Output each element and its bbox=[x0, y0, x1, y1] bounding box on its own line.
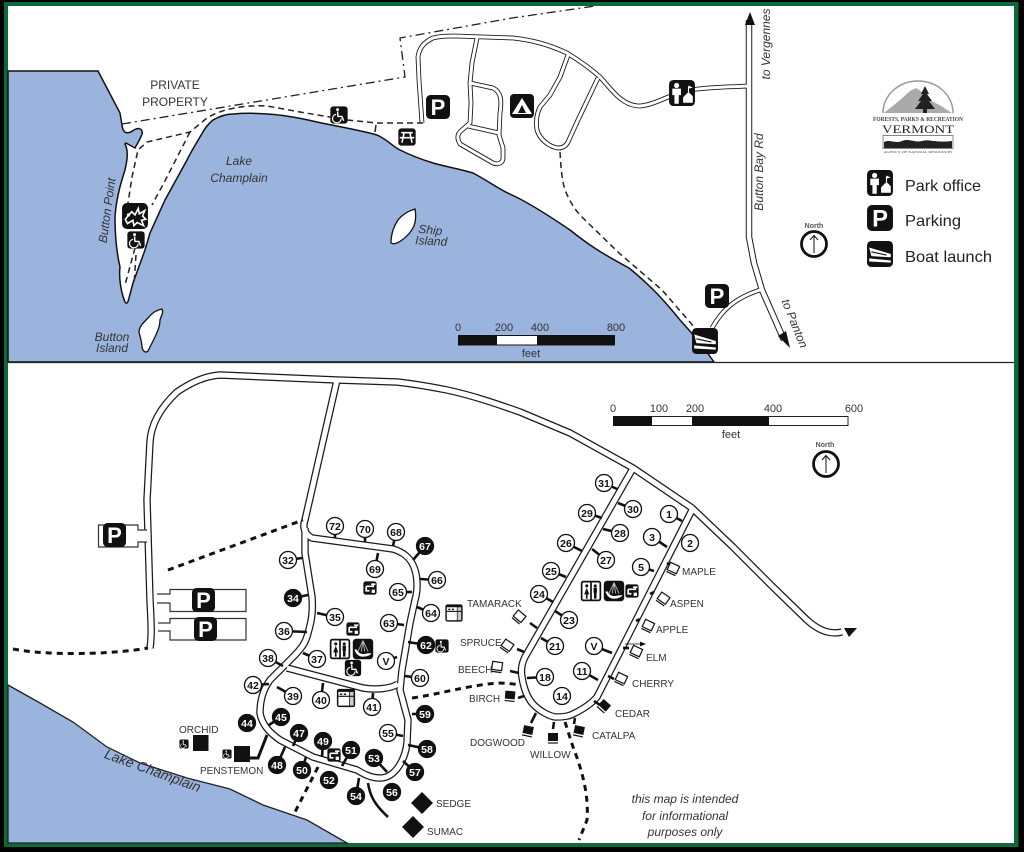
cherry: CHERRY bbox=[632, 679, 674, 690]
site 59: 59 bbox=[419, 709, 431, 721]
parking pad north bbox=[157, 588, 246, 613]
site 26: 26 bbox=[560, 538, 572, 550]
elm bbox=[623, 642, 667, 664]
site 29 bbox=[578, 504, 602, 522]
lake champlain label bbox=[210, 154, 268, 185]
logo: AGENCY OF NATURAL RESOURCES bbox=[884, 150, 953, 154]
site 14: 14 bbox=[556, 691, 568, 703]
site 36: 36 bbox=[278, 626, 290, 638]
site 50: 50 bbox=[296, 765, 308, 777]
site 25: 25 bbox=[545, 566, 557, 578]
cedar bbox=[594, 699, 650, 720]
aspen: ASPEN bbox=[670, 599, 704, 610]
site 54: 54 bbox=[350, 791, 362, 803]
icon: accessible west bbox=[345, 660, 361, 676]
catalpa bbox=[573, 718, 636, 742]
site 68: 68 bbox=[390, 527, 402, 539]
disclaimer: purposes only bbox=[647, 825, 723, 839]
north arrow overview bbox=[802, 223, 826, 256]
site 63: 63 bbox=[383, 618, 395, 630]
site 37 bbox=[303, 650, 326, 668]
site 38 bbox=[260, 650, 283, 666]
scale bar detail: 600 bbox=[845, 403, 863, 415]
scale bar detail: feet bbox=[722, 429, 740, 441]
site 56: 56 bbox=[386, 787, 398, 799]
site 42 bbox=[244, 676, 269, 694]
site 30 bbox=[618, 500, 642, 518]
sumac cabin bbox=[402, 816, 463, 838]
site 36 bbox=[276, 622, 307, 640]
site 29: 29 bbox=[581, 508, 593, 520]
lake champlain label: Lake bbox=[226, 154, 252, 168]
site 34: 34 bbox=[287, 593, 299, 605]
ship island label: Island bbox=[415, 233, 448, 249]
site 23: 23 bbox=[563, 615, 575, 627]
icon: park office bbox=[669, 80, 695, 106]
scale bar overview: 800 bbox=[607, 322, 625, 334]
site 27: 27 bbox=[600, 555, 612, 567]
site 23 bbox=[555, 611, 578, 628]
site 52 bbox=[320, 772, 338, 788]
icon: water spigot east bbox=[625, 584, 639, 598]
site 69: 69 bbox=[369, 564, 381, 576]
site 1: 1 bbox=[666, 509, 672, 521]
logo: VERMONT bbox=[882, 122, 955, 136]
site 30: 30 bbox=[627, 504, 639, 516]
maple: MAPLE bbox=[682, 567, 716, 578]
site 32 bbox=[280, 552, 302, 568]
site 39: 39 bbox=[287, 691, 299, 703]
apple: APPLE bbox=[656, 625, 689, 636]
scale bar detail: 100 bbox=[650, 403, 668, 415]
site 35 bbox=[317, 608, 344, 626]
button point label: Button Point bbox=[96, 176, 119, 244]
site 57: 57 bbox=[409, 767, 421, 779]
site 47: 47 bbox=[293, 728, 305, 740]
scale bar overview: 200 bbox=[495, 322, 513, 334]
campground roads bbox=[147, 375, 842, 778]
lake champlain water detail bbox=[8, 685, 347, 843]
button island label: Island bbox=[96, 341, 128, 355]
site 53 bbox=[366, 750, 387, 772]
site 38: 38 bbox=[262, 653, 274, 665]
disclaimer: for informational bbox=[642, 809, 728, 823]
scale bar detail bbox=[610, 403, 863, 441]
icon: restroom west bbox=[330, 639, 350, 659]
site 44: 44 bbox=[241, 718, 253, 730]
vault V east bbox=[586, 638, 612, 654]
site 2: 2 bbox=[687, 538, 693, 550]
campsites east loop bbox=[527, 474, 698, 704]
north arrow detail bbox=[814, 442, 838, 476]
icon: beach area bbox=[122, 203, 148, 229]
property boundary bbox=[122, 6, 595, 124]
site 31 bbox=[596, 474, 617, 492]
elm: ELM bbox=[646, 653, 667, 664]
site 50 bbox=[294, 757, 310, 778]
parking pad west: P bbox=[107, 523, 122, 548]
site 45 bbox=[269, 708, 290, 726]
site 48 bbox=[268, 747, 286, 774]
site 54 bbox=[348, 778, 364, 804]
icon: tent bbox=[510, 94, 534, 118]
penstemon cabin bbox=[200, 735, 267, 777]
site 49 bbox=[314, 732, 332, 757]
icon: shower east bbox=[604, 581, 624, 601]
north arrow overview: North bbox=[805, 223, 823, 230]
legend bbox=[867, 170, 992, 267]
site 53: 53 bbox=[368, 753, 380, 765]
legend: parking: P bbox=[872, 206, 888, 233]
site 48: 48 bbox=[271, 760, 283, 772]
site 31: 31 bbox=[598, 478, 610, 490]
legend: park office: Park office bbox=[905, 178, 981, 195]
logo bbox=[873, 81, 963, 154]
icon: boat launch bbox=[692, 328, 718, 354]
orchid cabin bbox=[179, 725, 218, 751]
icon: parking launch bbox=[705, 284, 729, 309]
site 58: 58 bbox=[421, 744, 433, 756]
panel: park overview map bbox=[8, 6, 1014, 362]
site 11: 11 bbox=[576, 666, 588, 678]
site 42: 42 bbox=[247, 680, 259, 692]
site 72 bbox=[326, 518, 344, 538]
private property label: PRIVATE bbox=[150, 78, 200, 92]
icon: water spigot central bbox=[346, 622, 360, 636]
ship island bbox=[391, 209, 416, 244]
site 49: 49 bbox=[317, 736, 329, 748]
site 25 bbox=[542, 562, 566, 580]
site 67: 67 bbox=[419, 541, 431, 553]
spruce bbox=[460, 638, 524, 653]
spruce: SPRUCE bbox=[460, 638, 502, 649]
sumac cabin: SUMAC bbox=[427, 827, 463, 838]
campsites west loop bbox=[238, 518, 446, 804]
sedge cabin: SEDGE bbox=[436, 799, 471, 810]
dogwood: DOGWOOD bbox=[470, 738, 525, 749]
site 65 bbox=[390, 584, 412, 600]
apple bbox=[636, 619, 689, 636]
site 59 bbox=[412, 706, 434, 722]
parking pad west bbox=[98, 523, 147, 548]
button island label bbox=[95, 330, 130, 355]
site 68 bbox=[388, 524, 404, 546]
lean-tos and cabins east bbox=[458, 562, 716, 761]
site 70 bbox=[356, 520, 374, 542]
private property label line 2: PROPERTY bbox=[142, 95, 208, 109]
site 27 bbox=[592, 549, 614, 568]
beech: BEECH bbox=[458, 665, 492, 676]
site 24 bbox=[530, 586, 553, 602]
trails bbox=[125, 106, 695, 328]
icon: water spigot north bbox=[363, 581, 377, 595]
vault V west bbox=[378, 652, 397, 670]
icon: water spigot south bbox=[327, 748, 341, 762]
site 64: 64 bbox=[425, 608, 437, 620]
button bay rd label: Button Bay Rd bbox=[752, 133, 766, 211]
lake champlain label detail: Lake Champlain bbox=[102, 745, 203, 795]
site 37: 37 bbox=[311, 654, 323, 666]
disclaimer bbox=[632, 792, 739, 839]
beech bbox=[458, 661, 519, 676]
road arrow to Panton bbox=[778, 331, 790, 348]
service road near site 56 bbox=[368, 783, 388, 817]
icon: accessible site 62 bbox=[435, 639, 449, 653]
icon: picnic bbox=[398, 128, 416, 146]
site 57 bbox=[403, 761, 424, 780]
willow: WILLOW bbox=[530, 750, 571, 761]
vault V west: V bbox=[382, 656, 390, 668]
aspen bbox=[650, 592, 704, 610]
site 45: 45 bbox=[275, 712, 287, 724]
site 40 bbox=[312, 683, 330, 708]
site 3: 3 bbox=[649, 532, 655, 544]
cedar: CEDAR bbox=[615, 709, 650, 720]
dogwood bbox=[470, 713, 536, 749]
site 47 bbox=[290, 724, 308, 746]
road arrow to Vergennes bbox=[745, 12, 755, 25]
scale bar overview: 0 bbox=[455, 322, 461, 334]
lake champlain label: Champlain bbox=[210, 171, 268, 185]
site 66: 66 bbox=[431, 575, 443, 587]
birch: BIRCH bbox=[469, 694, 500, 705]
site 51: 51 bbox=[345, 745, 357, 757]
site 5 bbox=[632, 558, 654, 576]
site 26 bbox=[558, 534, 582, 552]
button island label: Button bbox=[95, 330, 130, 344]
site 55 bbox=[380, 724, 403, 742]
parking pad south: P bbox=[198, 617, 213, 642]
site 40: 40 bbox=[315, 695, 327, 707]
site 62: 62 bbox=[420, 640, 432, 652]
site 58 bbox=[408, 740, 436, 758]
icon: shower west bbox=[353, 639, 373, 659]
icon: parking campground: P bbox=[431, 95, 445, 120]
icon: accessible trail bbox=[330, 106, 348, 124]
site 28: 28 bbox=[614, 528, 626, 540]
site 51 bbox=[342, 742, 360, 766]
site 28 bbox=[603, 524, 628, 542]
icon: tamarack camper bbox=[445, 604, 463, 622]
willow bbox=[530, 722, 571, 761]
overview roads bbox=[418, 20, 784, 340]
road end arrow bbox=[844, 628, 857, 637]
parking pad south bbox=[158, 617, 246, 642]
site 64 bbox=[417, 604, 440, 622]
site 32: 32 bbox=[282, 555, 294, 567]
ship island label: Ship bbox=[418, 222, 443, 238]
site 21: 21 bbox=[549, 641, 561, 653]
site 55: 55 bbox=[382, 728, 394, 740]
scale bar detail: 400 bbox=[764, 403, 782, 415]
scale bar overview bbox=[455, 322, 625, 360]
lake champlain water overview bbox=[8, 71, 714, 362]
legend: parking bbox=[867, 205, 961, 233]
penstemon cabin: PENSTEMON bbox=[200, 766, 263, 777]
icon: parking campground bbox=[426, 95, 450, 120]
icon: trailer dump bbox=[337, 689, 355, 707]
foot trails bbox=[13, 520, 587, 840]
site 60 bbox=[405, 670, 428, 686]
maple bbox=[666, 562, 716, 578]
birch bbox=[469, 691, 524, 705]
logo: FORESTS, PARKS & RECREATION bbox=[873, 116, 963, 123]
site 60: 60 bbox=[414, 673, 426, 685]
site 63 bbox=[380, 614, 404, 632]
site 67 bbox=[413, 538, 434, 560]
sedge cabin bbox=[411, 792, 471, 814]
site 11 bbox=[574, 662, 598, 680]
vault V east: V bbox=[590, 641, 598, 653]
site 3 bbox=[644, 528, 667, 547]
scale bar overview: 400 bbox=[531, 322, 549, 334]
site 34 bbox=[284, 590, 308, 606]
disclaimer: this map is intended bbox=[632, 792, 739, 806]
button island bbox=[139, 309, 163, 352]
site 18: 18 bbox=[539, 672, 551, 684]
site 52: 52 bbox=[323, 775, 335, 787]
site 5: 5 bbox=[638, 562, 644, 574]
site 44 bbox=[238, 714, 256, 732]
site 24: 24 bbox=[533, 589, 545, 601]
site 65: 65 bbox=[392, 587, 404, 599]
site 70: 70 bbox=[359, 524, 371, 536]
site 72: 72 bbox=[329, 521, 341, 533]
scale bar detail: 200 bbox=[686, 403, 704, 415]
icon: parking launch: P bbox=[710, 284, 724, 309]
ship island label bbox=[415, 222, 448, 249]
site 62 bbox=[408, 636, 434, 654]
site 21 bbox=[541, 638, 564, 654]
site 41 bbox=[364, 693, 380, 716]
orchid cabin: ORCHID bbox=[179, 725, 218, 736]
site 18 bbox=[527, 668, 554, 686]
scale bar detail: 0 bbox=[610, 403, 616, 415]
site 35: 35 bbox=[329, 612, 341, 624]
north arrow detail: North bbox=[816, 442, 834, 449]
cherry bbox=[608, 672, 674, 690]
site 1 bbox=[660, 506, 682, 522]
site 14 bbox=[554, 688, 570, 704]
map divider bbox=[8, 362, 1014, 364]
site 56 bbox=[384, 784, 400, 800]
site 2 bbox=[682, 534, 698, 552]
to vergennes label: to Vergennes bbox=[759, 9, 773, 79]
site 41: 41 bbox=[366, 702, 378, 714]
icon: accessible point bbox=[127, 231, 145, 249]
tamarack bbox=[467, 599, 537, 628]
panel: campground detail map bbox=[8, 375, 863, 843]
site 66 bbox=[420, 572, 446, 588]
tamarack: TAMARACK bbox=[467, 599, 522, 610]
to panton label: to Panton bbox=[779, 297, 811, 350]
legend: parking: Parking bbox=[905, 213, 961, 230]
parking pad north: P bbox=[196, 588, 211, 613]
scale bar overview: feet bbox=[522, 348, 540, 360]
catalpa: CATALPA bbox=[592, 731, 636, 742]
site 39 bbox=[277, 687, 302, 704]
icon: restroom east bbox=[581, 581, 601, 601]
site 69 bbox=[366, 553, 384, 578]
legend: boat launch: Boat launch bbox=[905, 249, 992, 266]
